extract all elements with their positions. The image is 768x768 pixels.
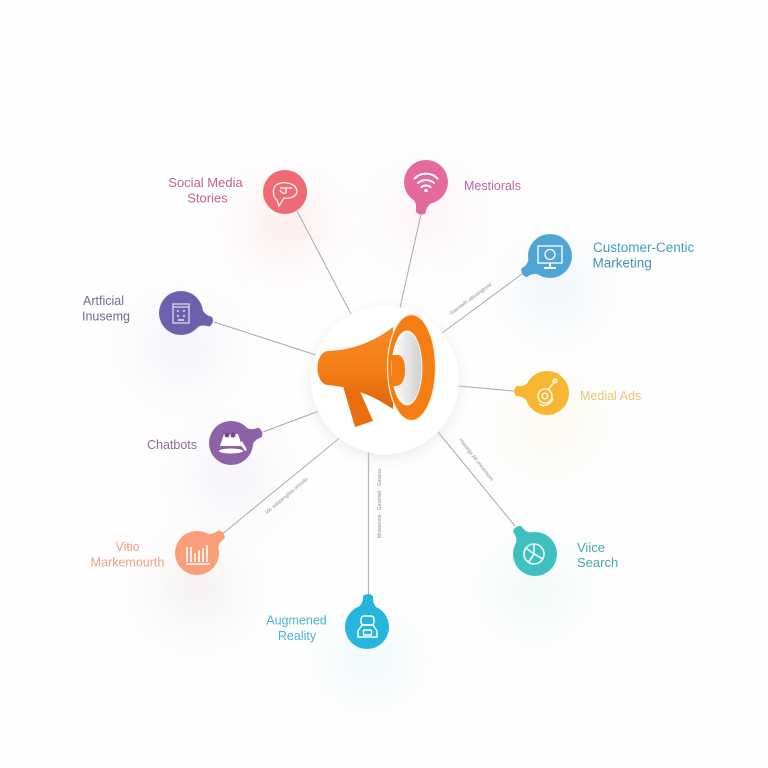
icon: robot bbox=[219, 432, 247, 454]
small line captions: Hastings Alt sneamsom bbox=[457, 438, 494, 482]
label: Viice bbox=[577, 540, 605, 555]
label: Stories bbox=[187, 190, 228, 206]
central hub circle bbox=[311, 306, 459, 458]
label: Markemourth bbox=[91, 556, 164, 570]
label: Chatbots bbox=[147, 438, 197, 452]
icon: device panel bbox=[173, 304, 189, 323]
label: Search bbox=[577, 555, 618, 570]
label: Marketing bbox=[592, 256, 652, 270]
icon: bar chart bbox=[186, 545, 210, 564]
node: Customer-Centic Marketing bbox=[516, 234, 695, 283]
label: Artficial bbox=[83, 294, 124, 308]
icon: wifi bbox=[414, 174, 438, 187]
node: Medial Ads bbox=[513, 371, 641, 415]
small line captions: Gasrswth uttissingtond bbox=[449, 282, 493, 317]
node: Vioce Search bbox=[507, 521, 618, 576]
label: Mestiorals bbox=[464, 179, 521, 193]
label: Social Media bbox=[168, 175, 243, 190]
small line captions: Mosoenne · Gasxlnet · Gsssiss bbox=[377, 468, 383, 538]
node: Video Markemourth bbox=[91, 524, 230, 575]
node: Mestiorals bbox=[404, 160, 521, 216]
connector lines bbox=[214, 211, 522, 595]
node: Augmented Reality bbox=[266, 594, 389, 649]
small line captions: Ido sstspenglow onsodo bbox=[264, 476, 310, 516]
megaphone cone bbox=[318, 327, 393, 409]
icon: speech bubble bbox=[273, 183, 297, 206]
node: Artificial Inuseng bbox=[82, 291, 216, 335]
label: Augmened bbox=[266, 614, 327, 628]
label: Medial Ads bbox=[580, 389, 641, 403]
icon: pie dial bbox=[524, 544, 544, 564]
icon: orange megaphone bbox=[318, 314, 436, 427]
megaphone handle bbox=[343, 386, 373, 427]
icon: monitor bbox=[538, 246, 562, 268]
small line captions bbox=[264, 282, 494, 538]
node: Social Media Stories bbox=[168, 170, 307, 214]
icon: person lock bbox=[358, 616, 377, 637]
megaphone driver bbox=[392, 355, 405, 386]
soft coloured shadows behind nodes bbox=[139, 181, 597, 690]
icon: target hook bbox=[538, 379, 557, 405]
label: Reality bbox=[278, 629, 317, 643]
label: Customer-Centic bbox=[593, 240, 695, 255]
megaphone bell ring bbox=[388, 314, 436, 420]
node: Chatbots bbox=[147, 421, 266, 465]
label: Inusemg bbox=[82, 310, 130, 324]
megaphone dish bbox=[392, 330, 422, 406]
label: Viŧio bbox=[115, 540, 140, 554]
